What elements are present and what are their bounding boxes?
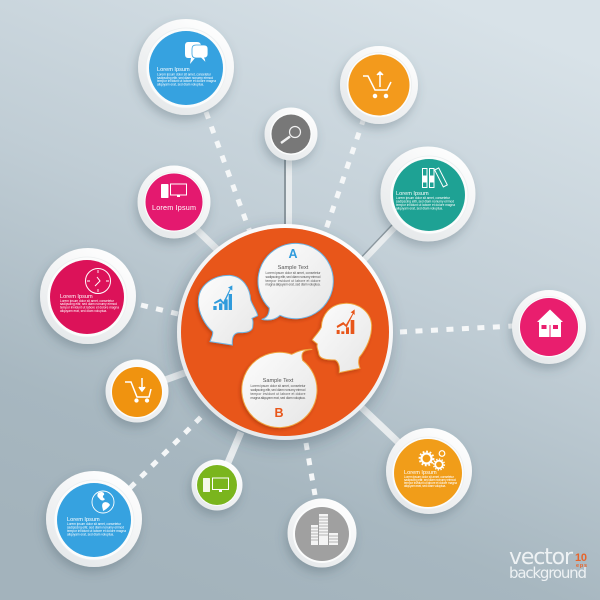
text block: Lorem Ipsum [396,191,429,197]
body text A: sadipscing elitr, sed diam nonumy eirmod [266,275,321,279]
text block: tempor invidunt ut labore et dolore magna [67,529,126,533]
heading sample text B: Sample Text [263,378,294,384]
speech bubble B [242,349,317,428]
body text B [250,384,306,400]
circle: pink home [512,290,586,364]
text block: Lorem Ipsum [67,517,100,523]
speech bubble A [258,243,333,320]
icon: magnifier [281,126,300,143]
text block [67,517,126,536]
body text B: magna aliquyam erat, sed diam voluptua. [250,396,306,400]
body text A: magna aliquyam erat, sed diam voluptua. [266,282,321,286]
label: Lorem Ipsum [152,203,196,212]
text block: sadipscing elitr, sed diam nonumy eirmod [396,200,454,204]
label B: B [274,406,284,420]
text block: Lorem Ipsum [60,294,93,300]
circle: crimson clock [40,248,136,344]
body text A: Lorem ipsum dolor sit amet, consetetur [266,271,321,275]
text block: sadipscing elitr, sed diam nonumy eirmod [157,76,213,80]
text block: aliquyam erat, sed diam voluptua. [396,206,443,210]
text block: Lorem Ipsum [157,67,190,73]
text block: aliquyam erat, sed diam voluptua. [60,309,107,313]
head left [198,275,258,345]
text block: aliquyam erat, sed diam voluptua. [404,484,446,488]
heading sample text A: Sample Text [278,265,309,271]
text block: sadipscing elitr, sed diam nonumy eirmod [60,302,117,306]
circle: grey magnifier [264,108,318,160]
text block: aliquyam erat, sed diam voluptua. [67,532,114,536]
text block: tempor invidunt ut labore et dolore magna [157,79,216,83]
text block: tempor invidunt ut labore et dolore magna [404,481,457,485]
watermark: eps [576,563,587,569]
icon: cart down [125,378,151,402]
text block: sadipscing elitr, sed diam nonumy eirmod [404,478,456,482]
watermark: background [509,564,587,582]
text block [157,67,216,86]
icon: computer [203,478,228,492]
text block: tempor invidunt ut labore et dolore magna [60,306,119,310]
icon: gears [420,451,445,470]
icon: computer [161,184,186,198]
circle: orange cart top [340,46,418,124]
chart icon left [213,285,232,310]
body text B: Lorem ipsum dolor sit amet, consetetur [250,384,306,388]
circle: blue speech [138,19,234,115]
circle: blue globe [46,471,142,567]
icon: globe [92,491,114,513]
watermark: vector [509,545,574,570]
circle: teal binders [380,146,476,242]
text block: sadipscing elitr, sed diam nonumy eirmod [67,526,124,530]
head right [312,303,372,373]
central orange circle [177,224,393,440]
chart icon right [337,309,355,334]
icon: cart up [363,72,391,98]
body text B: sadipscing elitr, sed diam nonumy eirmod [250,388,306,392]
body text B: tempor invidunt ut labore et dolore [250,392,306,396]
text block: aliquyam erat, sed diam voluptua. [157,82,204,86]
circle: orange gears [386,428,472,514]
text block: Lorem ipsum dolor sit amet, consetetur [60,299,115,303]
label A: A [288,247,298,261]
text block [60,294,119,313]
text block: Lorem Ipsum [404,470,437,476]
icon: home [537,310,563,337]
icon: speech bubbles [185,42,208,64]
body text A: tempor invidunt ut labore et dolore [266,279,321,283]
dashed connectors [130,112,513,495]
circle: green computer [192,460,242,510]
body text A [266,271,321,286]
solid connectors [165,158,399,465]
text block [396,191,455,210]
icon: clock [86,268,110,294]
text block: Lorem ipsum dolor sit amet, consetetur [157,72,212,76]
text block [404,470,457,488]
circle: orange cart left [106,360,168,422]
watermark: 10 [575,552,587,564]
icon: buildings [311,514,338,545]
text block: Lorem ipsum dolor sit amet, consetetur [67,522,122,526]
text block: Lorem ipsum dolor sit amet, consetetur [396,196,451,200]
icon: binders [422,168,447,188]
circle: small pink monitor [138,166,210,238]
text block: tempor invidunt ut labore et dolore magna [396,203,455,207]
circle: grey buildings [288,498,356,568]
watermark [509,545,587,582]
text block: Lorem ipsum dolor sit amet, consetetur [404,475,455,479]
